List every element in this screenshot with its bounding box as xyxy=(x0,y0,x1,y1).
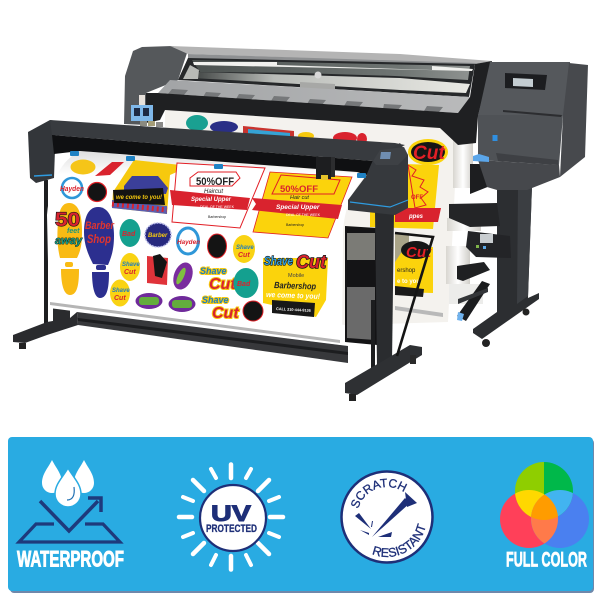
feature panel xyxy=(8,437,594,593)
yellow coupon: Barbershop xyxy=(286,223,304,227)
back printer xyxy=(124,46,588,347)
back printer yellow poster xyxy=(395,233,433,297)
front cutter xyxy=(13,120,433,401)
sticker: Shave and Cut small lower: Shave xyxy=(202,295,229,305)
sticker: Shave and Cut small xyxy=(200,266,236,293)
white coupon with red border: DEAL OF THE WEEK xyxy=(200,205,235,209)
white coupon with red border: Barbershop xyxy=(208,215,226,219)
sticker: Hayden ring: Hayden xyxy=(60,186,84,193)
back printer lower margin strip xyxy=(395,306,443,317)
white coupon with red border: Special Upper xyxy=(191,197,232,203)
sticker: Shave and Cut small lower xyxy=(202,295,239,322)
front frame and rod xyxy=(395,233,433,356)
sticker: teal oval xyxy=(120,219,140,247)
sticker: yellow oval middle: Shave xyxy=(122,262,140,268)
resistant label: RESISTANT xyxy=(372,523,426,558)
Shave and Cut poster: Barbershop xyxy=(274,280,317,291)
yellow coupon xyxy=(252,172,352,238)
cutter blue accent left xyxy=(34,175,52,176)
cutter rail xyxy=(52,135,373,176)
blue media clamps xyxy=(70,151,366,178)
UV label: UV xyxy=(211,501,251,526)
sticker: Shave and Cut small lower: Cut xyxy=(212,305,239,322)
waterproof label: WATERPROOF xyxy=(17,546,124,572)
white coupon with red border xyxy=(170,163,265,228)
sticker: purple oval lower right xyxy=(168,296,196,312)
sticker: Hayden ring xyxy=(60,178,84,198)
sticker: yellow footprint: away xyxy=(55,235,83,247)
back printer yellow poster: Cut xyxy=(406,244,432,261)
sticker: yellow oval right xyxy=(233,235,255,263)
sticker: red square xyxy=(147,254,168,285)
white coupon headline: 50%OFF xyxy=(196,176,234,188)
back printer yellow poster: ershop xyxy=(397,268,416,274)
sticker: top yellow oval xyxy=(70,160,96,174)
feature: scratch resistant xyxy=(340,470,434,564)
sticker: car poster xyxy=(112,160,190,214)
feature: full color xyxy=(500,462,590,572)
Shave and Cut poster: Mobile xyxy=(288,273,304,279)
back printer stand xyxy=(473,186,539,347)
feature: waterproof xyxy=(17,460,124,572)
back printer left end cap xyxy=(124,46,188,125)
icon: UV badge xyxy=(200,485,266,551)
back printer window xyxy=(178,58,475,97)
sticker: Hayden oval ring: Hayden xyxy=(177,239,200,246)
panel background xyxy=(8,437,593,591)
feature: UV protected xyxy=(179,464,283,570)
Shave and Cut poster: CALL 210-444-9136 xyxy=(276,307,311,313)
back printer media sheet xyxy=(165,108,458,325)
Shave and Cut poster xyxy=(263,252,328,317)
Shave and Cut poster: we come to you! xyxy=(266,290,321,301)
sticker: yellow oval right: Cut xyxy=(238,252,250,259)
blue status button xyxy=(492,135,498,141)
back printer ink panel xyxy=(131,95,163,127)
sticker: black circle xyxy=(88,182,106,202)
sticker: yellow footprint xyxy=(55,203,83,295)
sticker: yellow oval lower xyxy=(110,280,130,306)
poster title: Shave xyxy=(264,254,293,268)
sticker: yellow oval lower: Shave xyxy=(112,288,130,294)
sticker: purple oval rotated xyxy=(170,260,196,292)
back printer yellow coupon xyxy=(370,139,448,229)
icon: colour wheel xyxy=(500,462,590,550)
cutter left end cap xyxy=(28,120,56,183)
Shave and Cut poster: Cut xyxy=(296,252,327,272)
yellow coupon: Hair cut xyxy=(290,195,309,201)
sticker: yellow oval middle xyxy=(120,253,140,281)
blue release handle xyxy=(473,154,489,162)
sticker: car poster: we come to you! xyxy=(116,194,163,201)
sticker: yellow oval middle: Cut xyxy=(124,269,136,276)
sticker: navy oval: Barber xyxy=(148,233,168,239)
cutter carriage xyxy=(316,157,335,180)
sticker: yellow oval right: Shave xyxy=(236,245,254,251)
icon: badge xyxy=(342,472,432,562)
white coupon with red border: Haircut xyxy=(204,189,223,195)
cutter top beam xyxy=(50,120,405,161)
sticker: blue footprint: Barber xyxy=(85,220,115,232)
cutter right post xyxy=(375,212,394,366)
yellow coupon: DEAL OF THE WEEK xyxy=(286,213,321,217)
panel shadow xyxy=(10,439,594,593)
media rollers and take-up unit xyxy=(446,140,511,321)
yellow coupon: Special Upper xyxy=(276,204,320,211)
back printer printed stickers xyxy=(186,115,367,145)
back printer front beam xyxy=(146,61,492,145)
icon: sun rays xyxy=(179,464,283,570)
back printer yellow coupon: ppes xyxy=(408,214,424,220)
sticker: black circle lower right xyxy=(243,301,263,321)
cutter stand xyxy=(13,180,433,401)
sticker: black oval xyxy=(208,234,226,258)
sticker: yellow footprint: 50 xyxy=(55,210,80,231)
cutter blue accent xyxy=(350,200,408,207)
stickers on cutter sheet xyxy=(55,160,263,322)
sticker: top red xyxy=(95,162,124,176)
sticker: Hayden oval ring xyxy=(177,228,200,254)
back printer lid xyxy=(170,46,492,64)
sticker: navy oval xyxy=(145,223,171,247)
yellow coupon headline: 50%OFF xyxy=(280,184,319,194)
sticker: yellow footprint: feet xyxy=(67,228,80,235)
back printer yellow coupon: OFF xyxy=(411,195,423,201)
cutter right end cap xyxy=(348,143,408,215)
sticker: teal oval: Bad xyxy=(122,231,136,238)
sticker: blue footprint: Shop xyxy=(87,232,111,246)
back printer yellow poster: e to you xyxy=(397,279,420,285)
sheet margin strip xyxy=(50,302,340,343)
icon: surface and arrow xyxy=(19,498,120,542)
dark area behind sheet xyxy=(345,226,377,345)
scratch label: SCRATCH xyxy=(351,478,408,508)
back coupon headline: Cut xyxy=(413,143,445,164)
protected label: PROTECTED xyxy=(206,523,257,535)
sticker: teal oval right: Bad xyxy=(237,281,251,288)
printer control screen xyxy=(505,73,547,90)
sticker: Shave and Cut small: Cut xyxy=(209,276,236,293)
sticker: purple oval lower left xyxy=(136,293,162,309)
sticker: yellow oval lower: Cut xyxy=(114,295,126,302)
icon: nail xyxy=(355,492,417,537)
back printer ledge with buttons xyxy=(158,80,470,113)
cutter media sheet xyxy=(47,151,368,345)
sticker: teal oval right xyxy=(234,268,258,298)
icon: water drops xyxy=(42,460,94,507)
back printer right housing xyxy=(473,62,588,190)
sticker: blue footprint xyxy=(84,207,115,298)
sticker: Shave and Cut small: Shave xyxy=(200,266,227,276)
